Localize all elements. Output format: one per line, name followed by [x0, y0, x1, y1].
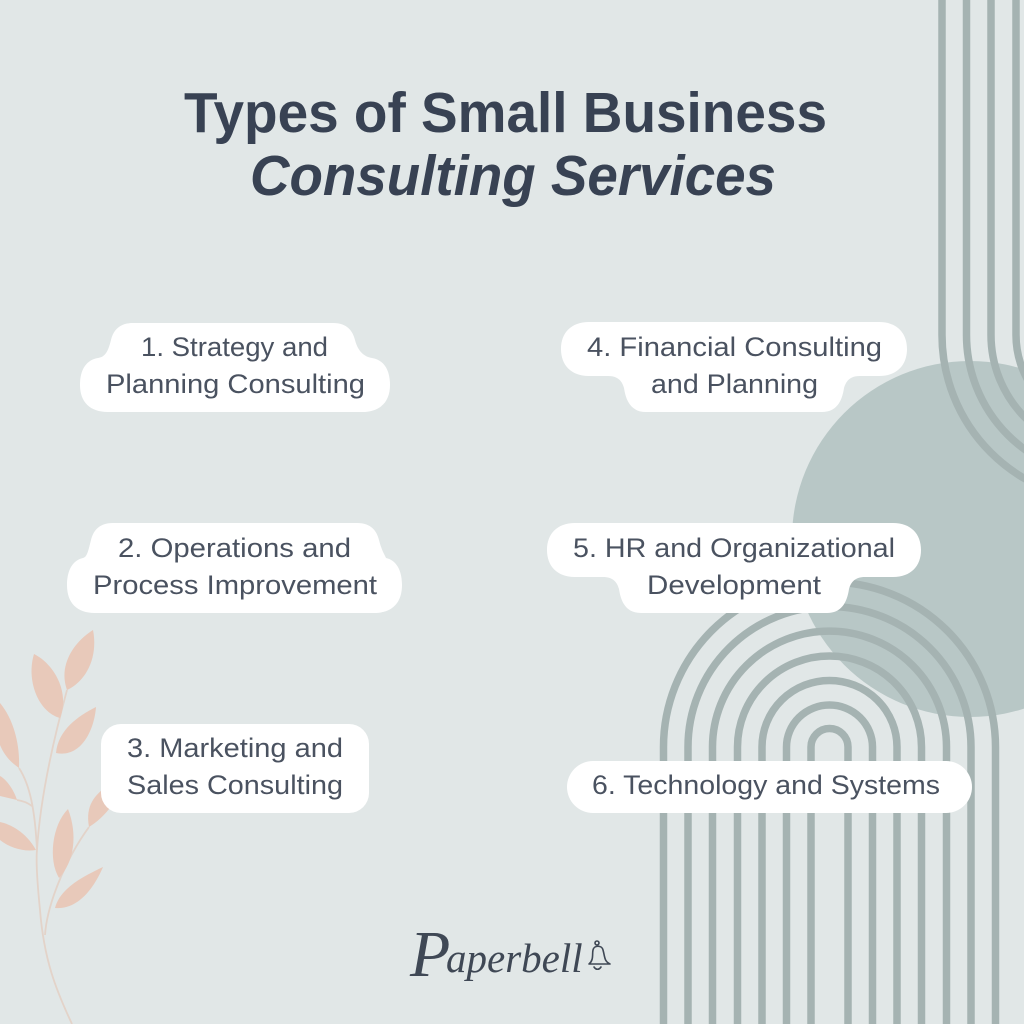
decorative circle [792, 361, 1024, 717]
item 6: technology and systems [567, 761, 972, 813]
item 1: strategy and planning: Planning Consulting [106, 369, 365, 399]
item 6: technology and systems: 6. Technology and Systems [592, 770, 940, 800]
item 5: HR and organizational [547, 523, 921, 613]
logo: Paperbell: P [409, 918, 450, 991]
item 4: financial consulting: and Planning [651, 369, 818, 399]
logo: Paperbell: aperbell [446, 935, 583, 981]
item 3: marketing and sales: Sales Consulting [127, 770, 343, 800]
item 2: operations and process: 2. Operations and [118, 533, 351, 563]
arches: top right [942, 0, 1024, 501]
item 3: marketing and sales [101, 724, 369, 813]
item 3: marketing and sales: 3. Marketing and [127, 733, 343, 763]
title: Types of Small Business [184, 81, 827, 145]
item 4: financial consulting [561, 322, 907, 412]
item 1: strategy and planning [80, 323, 390, 412]
item 5: HR and organizational: 5. HR and Organizational [573, 533, 895, 563]
title: Consulting Services [250, 144, 776, 208]
arches: bottom right [664, 582, 996, 1024]
item 4: financial consulting: 4. Financial Consulting [587, 332, 882, 362]
logo: Paperbell [409, 918, 610, 991]
item 1: strategy and planning: 1. Strategy and [141, 332, 328, 362]
item 2: operations and process: Process Improvement [93, 570, 378, 600]
icon: bell [589, 941, 610, 969]
item 2: operations and process [67, 523, 402, 613]
item 5: HR and organizational: Development [647, 570, 822, 600]
botanical sprig [0, 630, 112, 1024]
title [184, 81, 827, 208]
